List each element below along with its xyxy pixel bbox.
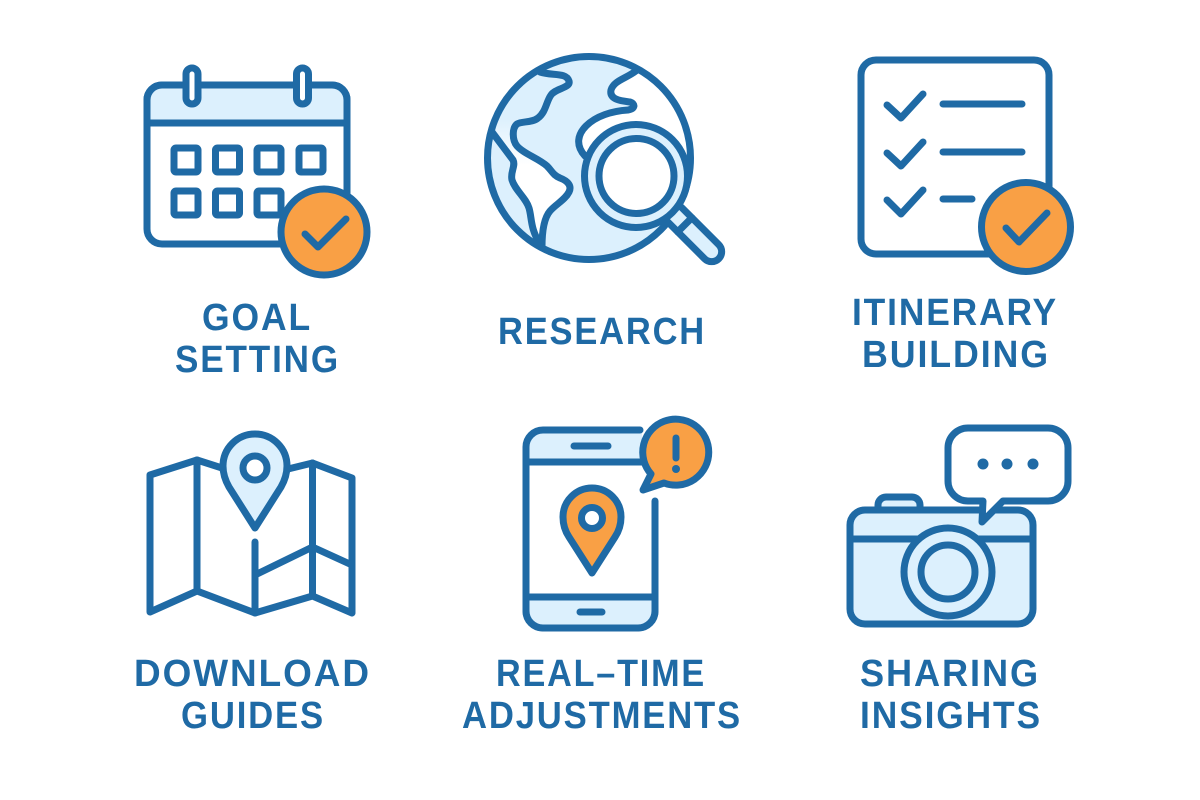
icon: folded map with pin (150, 434, 352, 613)
label: itinerary building: ITINERARY (852, 292, 1058, 334)
icon: calendar with check badge (147, 68, 367, 275)
label: goal setting (175, 297, 340, 381)
icon: camera with speech bubble (850, 428, 1068, 624)
label: real-time adjustments: REAL–TIME (496, 653, 706, 695)
label: download guides: DOWNLOAD (134, 653, 371, 695)
icon: globe with magnifying glass (488, 56, 726, 266)
label: research: RESEARCH (498, 311, 706, 353)
label: sharing insights: SHARING (860, 653, 1040, 695)
label: download guides (134, 653, 371, 737)
label: sharing insights (860, 653, 1042, 737)
label: itinerary building (852, 292, 1058, 376)
label: real-time adjustments: ADJUSTMENTS (462, 695, 742, 737)
icon: checklist with check badge (861, 60, 1070, 272)
label: goal setting: SETTING (175, 339, 340, 381)
label: goal setting: GOAL (202, 297, 312, 339)
label: sharing insights: INSIGHTS (860, 695, 1042, 737)
label: itinerary building: BUILDING (862, 334, 1050, 376)
icon: smartphone with pin and alert bubble (526, 419, 709, 628)
label: real-time adjustments (462, 653, 742, 737)
label: download guides: GUIDES (181, 695, 325, 737)
